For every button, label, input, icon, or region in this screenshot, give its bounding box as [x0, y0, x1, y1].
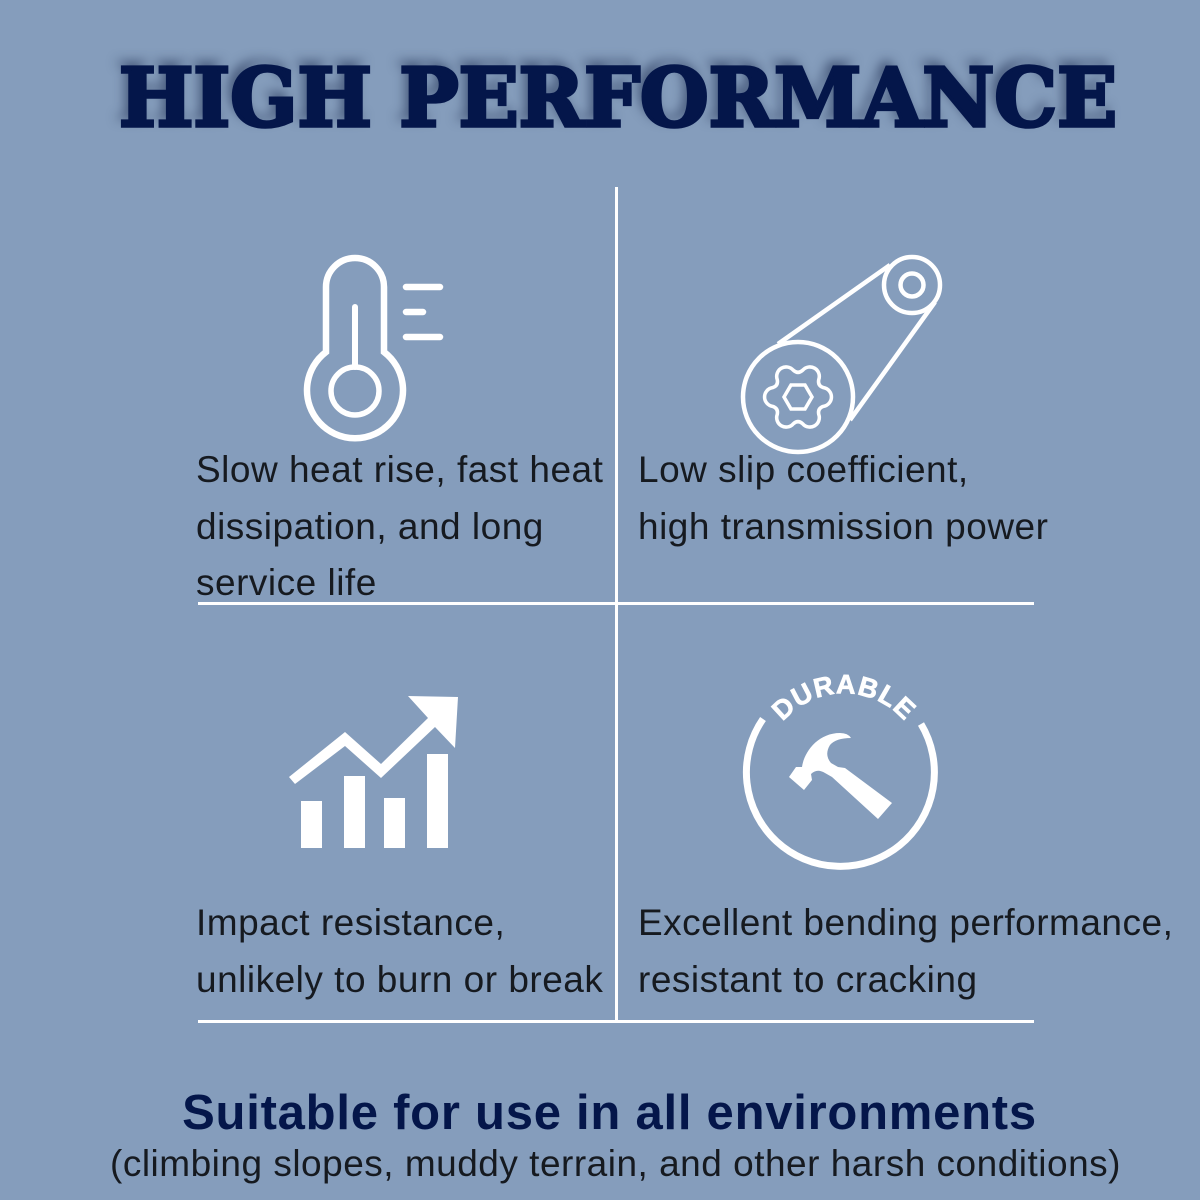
footer subheading: (climbing slopes, muddy terrain, and other harsh conditions): [110, 1143, 1121, 1184]
text: impact: [196, 902, 603, 1000]
text: bending: [638, 902, 1173, 1000]
title: HIGH PERFORMANCE: [119, 50, 1117, 145]
icon: durable hammer: DURABLE: [770, 674, 917, 721]
text: heat: service life: [196, 562, 377, 603]
text: slip: high transmission power: [638, 506, 1048, 546]
text: bending: Excellent bending performance,: [638, 902, 1173, 943]
horizontal divider lower: [198, 1020, 1034, 1023]
footer heading: Suitable for use in all environments: [182, 1086, 1037, 1140]
text: heat: dissipation, and long: [196, 506, 544, 546]
vertical divider: [615, 187, 618, 1021]
text: heat: [196, 449, 603, 603]
horizontal divider upper: [198, 602, 1034, 605]
text: bending: resistant to cracking: [638, 958, 978, 1000]
text: heat: Slow heat rise, fast heat: [196, 449, 603, 490]
text: impact: unlikely to burn or break: [196, 958, 603, 1000]
text: slip: [638, 449, 1048, 546]
text: impact: Impact resistance,: [196, 902, 505, 943]
text: slip: Low slip coefficient,: [638, 449, 969, 490]
